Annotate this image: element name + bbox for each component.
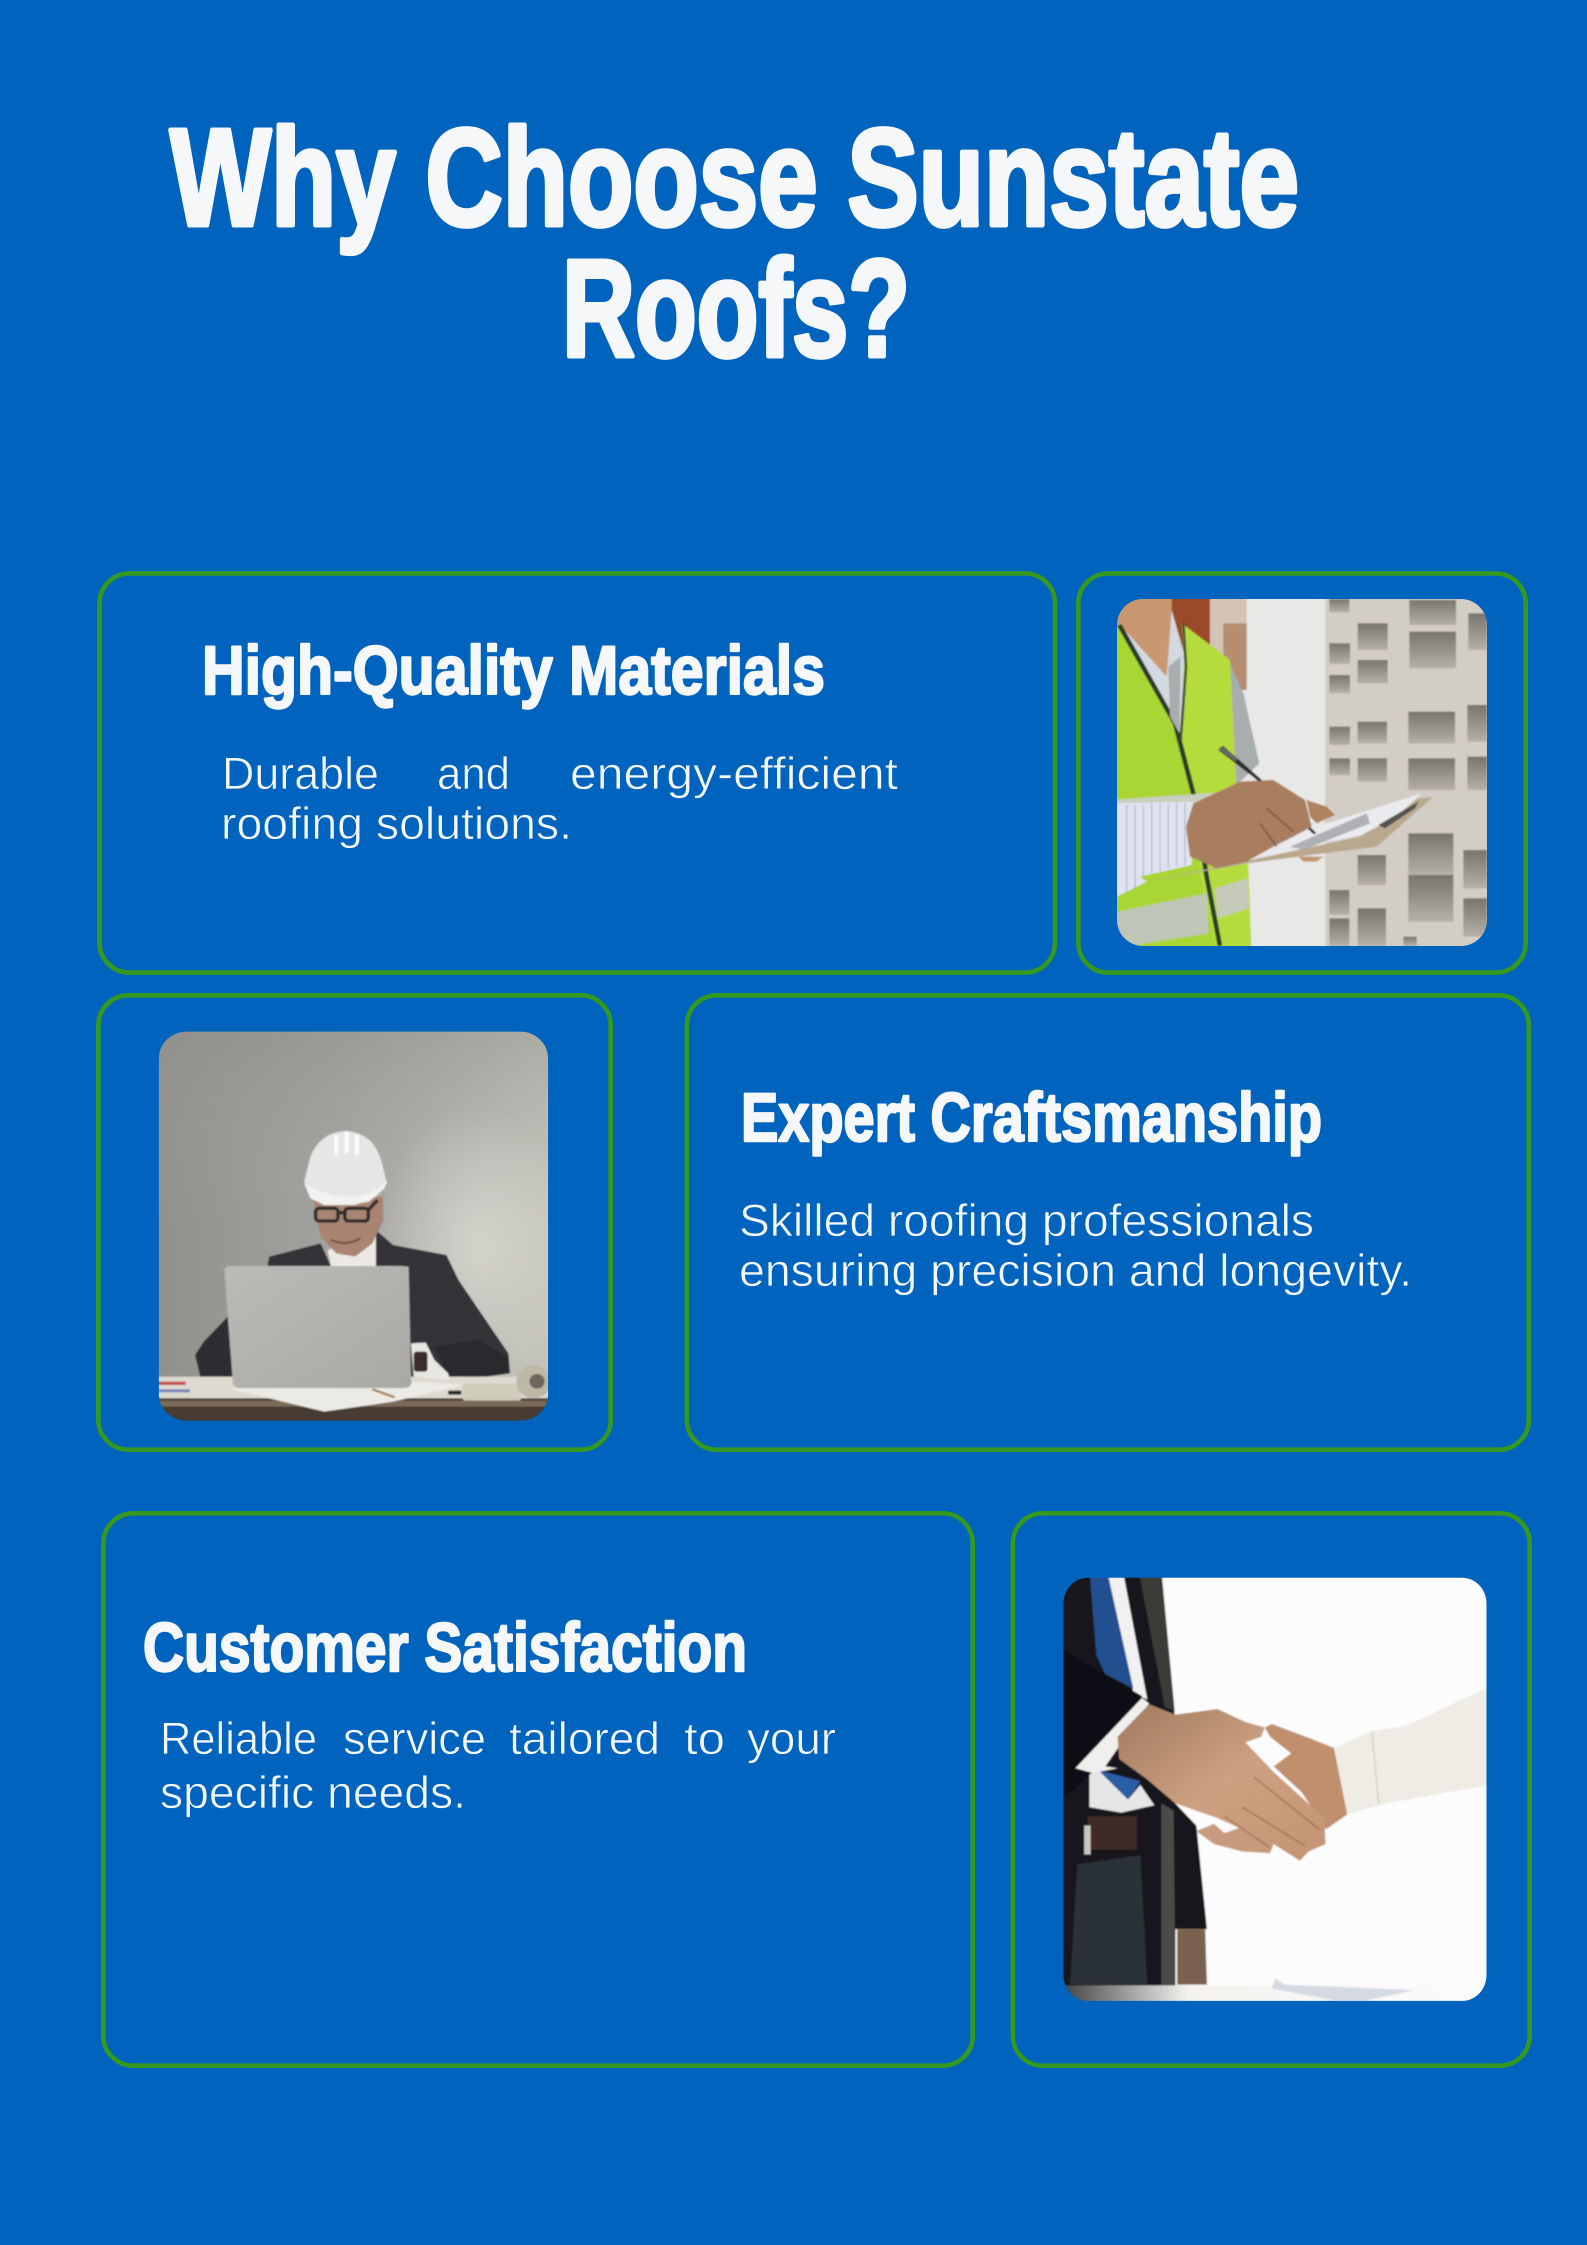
neck and face [328, 1237, 376, 1267]
table [152, 1377, 555, 1400]
glasses [316, 1200, 378, 1221]
title: Why Choose Sunstate [170, 101, 1299, 255]
text: craftsmanship description [739, 1195, 1412, 1296]
text: materials description: energy-efficient [570, 748, 899, 799]
heading: high-quality materials: High-Quality Materials [202, 632, 825, 709]
striped cuff [1110, 802, 1193, 900]
text: craftsmanship description: Skilled roofing professionals [739, 1195, 1314, 1246]
suit [267, 1230, 510, 1382]
text: satisfaction description: service [343, 1713, 486, 1764]
text: materials description: and [437, 748, 510, 799]
pen [1218, 746, 1317, 834]
text: materials description: Durable [222, 748, 379, 799]
text: satisfaction description: tailored [509, 1713, 660, 1764]
text: materials description [221, 748, 899, 849]
text: satisfaction description: to [684, 1713, 725, 1764]
text: craftsmanship description: ensuring precision and longevity. [739, 1245, 1412, 1296]
text: satisfaction description: Reliable [160, 1713, 317, 1764]
floor [1066, 1984, 1307, 2001]
sleeve grey [1228, 660, 1259, 787]
panel: inspector photo [1078, 573, 1526, 973]
watch and cuff [411, 1343, 450, 1380]
laptop [224, 1266, 411, 1388]
tape roll [463, 1384, 521, 1401]
jacket sleeve [1064, 1650, 1142, 1796]
title: Roofs? [562, 232, 910, 386]
title [170, 101, 1299, 386]
panel: expert craftsmanship [687, 995, 1529, 1450]
panel: handshake photo [1013, 1513, 1530, 2066]
dark suit body [1056, 1570, 1207, 1988]
clipboard [1147, 797, 1433, 882]
near hand [1118, 1704, 1325, 1861]
panel: customer satisfaction [103, 1513, 973, 2066]
panel: engineer photo [98, 995, 611, 1450]
tie and shirt [1107, 1570, 1147, 1700]
far hand [1265, 1724, 1347, 1829]
photo: business handshake [1056, 1570, 1495, 2009]
neck and shirt [1117, 599, 1173, 676]
hard hat [304, 1131, 387, 1205]
second hand [1307, 800, 1335, 823]
reflective bands [1117, 792, 1216, 804]
legs [1177, 1929, 1207, 1985]
heading: expert craftsmanship: Expert Craftsmanship [741, 1079, 1322, 1156]
photo: engineer with hard hat at laptop [158, 1032, 548, 1421]
concrete wall [1325, 593, 1493, 953]
heading: customer satisfaction: Customer Satisfaction [143, 1609, 747, 1686]
white sleeve [1334, 1684, 1495, 1814]
panel: high-quality materials [100, 573, 1055, 973]
cuff [1075, 1698, 1149, 1773]
text: satisfaction description: specific needs. [160, 1767, 466, 1818]
vest [1117, 626, 1216, 946]
text: materials description: roofing solutions. [221, 798, 572, 849]
writing hand [1186, 780, 1312, 868]
text: satisfaction description: your [747, 1713, 836, 1764]
text: satisfaction description [160, 1713, 836, 1818]
photo: inspector writing on clipboard [1110, 593, 1493, 953]
belt [1088, 1816, 1137, 1850]
